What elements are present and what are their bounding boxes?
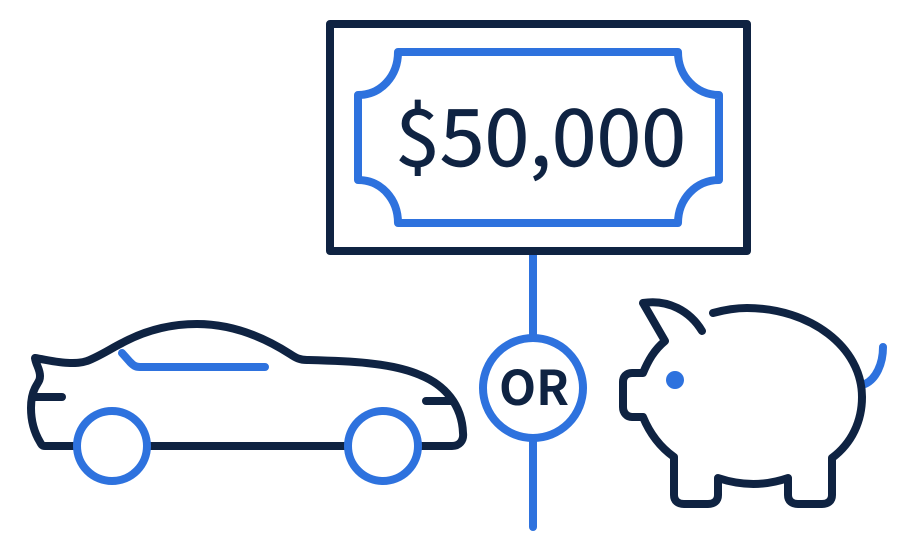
icon: car (31, 324, 463, 481)
pig body (623, 302, 862, 504)
car front light (426, 397, 452, 405)
car underside (150, 442, 345, 450)
car body (31, 324, 463, 446)
banknote inner border (358, 52, 719, 223)
badge: OR (483, 338, 583, 438)
pig tail (865, 347, 883, 384)
connector line: below OR badge (529, 440, 537, 527)
badge label: OR (499, 349, 569, 419)
amount: $50,000 (395, 74, 686, 189)
icon: piggy bank (623, 302, 883, 504)
car rear light (35, 393, 62, 401)
icon: banknote (330, 24, 747, 251)
car window line (122, 353, 265, 367)
badge ring (483, 338, 583, 438)
connector line: bill to OR badge (529, 252, 537, 336)
car rear wheel (77, 411, 147, 481)
car front wheel (348, 411, 418, 481)
pig eye (666, 371, 684, 389)
banknote outer frame (330, 24, 747, 251)
